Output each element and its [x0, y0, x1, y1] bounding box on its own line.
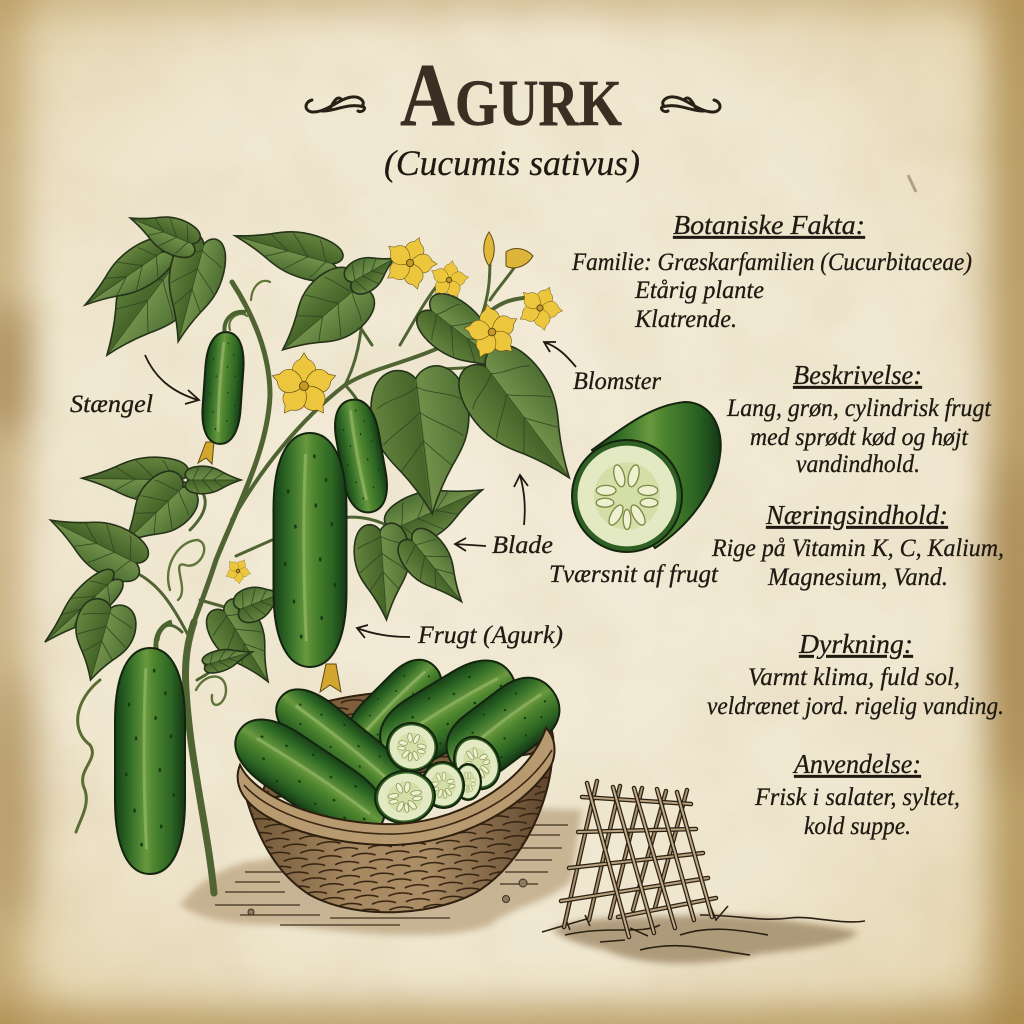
title [306, 46, 720, 183]
leaf [352, 522, 414, 622]
hanging cucumber, lower left [115, 622, 185, 874]
label: Blade: Blade [492, 532, 553, 559]
cucumber [222, 705, 398, 851]
cucumber skin [592, 402, 721, 548]
leaf [446, 333, 602, 503]
cut face [572, 440, 682, 552]
flower [508, 277, 572, 339]
panel: Næringsindhold [711, 500, 1004, 591]
text block: Familie: Græskarfamilien (Cucurbitaceae) [571, 249, 972, 276]
leaf [123, 201, 204, 263]
scientific name: (Cucumis sativus) [384, 143, 640, 183]
basket back [260, 690, 553, 800]
heading: Næringsindhold: [765, 500, 948, 530]
text block [707, 664, 1004, 720]
text block [711, 535, 1004, 591]
trellis [561, 781, 716, 937]
label: Stængel: Stængel [70, 391, 153, 418]
text block: Magnesium, Vand. [767, 564, 948, 591]
leaf [82, 456, 189, 502]
text block [754, 784, 960, 840]
leaf [261, 258, 384, 375]
leaf [379, 468, 492, 553]
stems and tendrils [76, 255, 535, 893]
cucumber slice [455, 764, 481, 800]
leaf [185, 466, 241, 494]
labels and arrows [70, 342, 719, 649]
leaf [201, 642, 255, 676]
leaf [153, 230, 232, 348]
leaf [366, 362, 481, 520]
leaf [76, 224, 218, 378]
text block [726, 395, 992, 478]
cucumber slice [372, 767, 438, 827]
text block: kold suppe. [804, 813, 911, 840]
heading: Anvendelse: [792, 749, 921, 779]
small cucumber, centre [330, 396, 392, 516]
panel: Botaniske Fakta [571, 210, 972, 333]
arrow: Blade to leaf [514, 475, 528, 525]
leaf [39, 497, 154, 589]
ground under basket [180, 808, 582, 935]
label: Frugt (Agurk): Frugt (Agurk) [417, 622, 563, 649]
leaf [409, 285, 526, 393]
cucumber [338, 649, 452, 763]
cucumber slice [446, 729, 508, 797]
text block: Etårig plante [634, 277, 764, 304]
ground under trellis [542, 905, 865, 963]
text block: vandindhold. [796, 451, 920, 478]
panel: Beskrivelse [726, 360, 992, 478]
ornament: right flourish [661, 97, 720, 112]
arrow: Stængel [145, 355, 199, 404]
text block: Varmt klima, fuld sol, [748, 664, 960, 691]
label: Tværsnit af frugt: Tværsnit af frugt [549, 561, 719, 588]
text block: med sprødt kød og højt [750, 424, 969, 451]
text block: Lang, grøn, cylindrisk frugt [726, 395, 992, 422]
leaf [230, 576, 291, 626]
cucumber [264, 676, 416, 814]
cucumbers in basket [222, 647, 572, 851]
arrow: Frugt [357, 625, 410, 638]
basket with cucumbers [222, 647, 572, 912]
cucumber slice [418, 759, 468, 811]
flower bud [484, 232, 494, 266]
cucumber [434, 664, 572, 792]
flower [425, 257, 473, 303]
text block: veldrænet jord. rigelig vanding. [707, 693, 1004, 720]
large cucumber [274, 433, 346, 692]
leaf [340, 243, 403, 299]
title text: AGURK [400, 46, 622, 145]
ornament: left flourish [306, 97, 365, 112]
label: Blomster: Blomster [573, 368, 661, 395]
flower [374, 228, 446, 299]
text block: Klatrende. [634, 306, 737, 333]
cucumber slice [383, 719, 441, 775]
flower bud [506, 249, 533, 268]
cucumber [368, 647, 528, 779]
leaf [199, 592, 290, 695]
leaf [62, 594, 141, 688]
leaf [229, 214, 346, 287]
small cucumber, upper left [198, 312, 246, 464]
text block: Frisk i salater, syltet, [754, 784, 960, 811]
leaf [33, 563, 129, 655]
basket body [240, 745, 553, 912]
basket rim [238, 728, 554, 845]
cross-section of fruit [572, 402, 721, 552]
flower [269, 353, 339, 420]
heading: Botaniske Fakta: [673, 210, 865, 240]
plant [33, 201, 602, 893]
flower bud [219, 553, 256, 589]
leaf [74, 232, 179, 322]
text block [571, 249, 972, 333]
flowers [219, 228, 572, 589]
leaf [391, 522, 479, 616]
heading: Beskrivelse: [793, 360, 922, 390]
arrow: Blomster [544, 342, 576, 367]
text block: Rige på Vitamin K, C, Kalium, [711, 535, 1004, 562]
flower [458, 299, 526, 365]
arrow: Blade to lower leaf [455, 538, 486, 551]
heading: Dyrkning: [798, 629, 913, 659]
leaves [33, 201, 602, 695]
leaf [106, 463, 206, 562]
panel: Anvendelse [754, 749, 960, 840]
panel: Dyrkning [707, 629, 1004, 720]
